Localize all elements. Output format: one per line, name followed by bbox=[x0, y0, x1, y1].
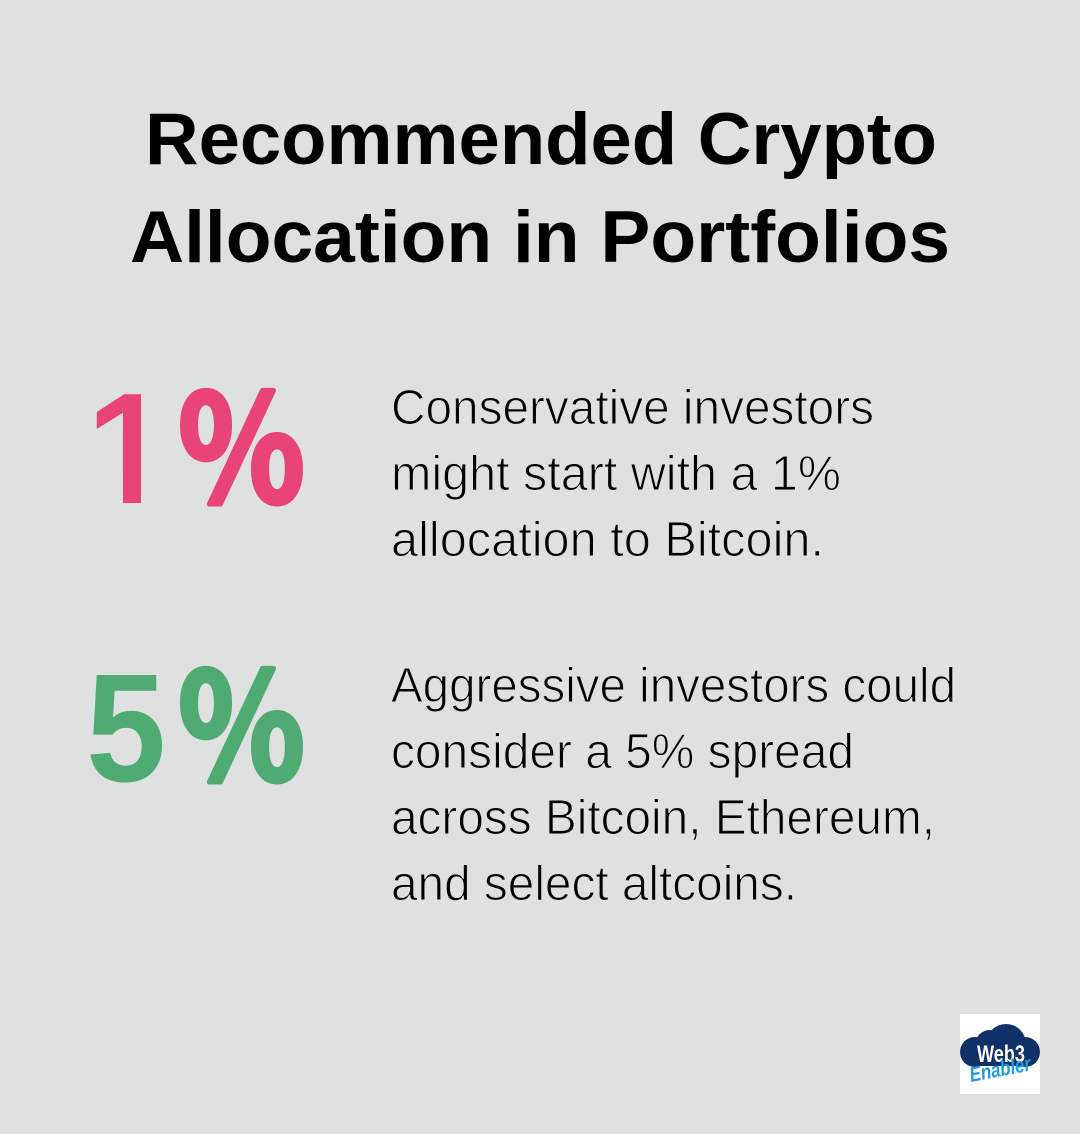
stat: 1%: 1 bbox=[86, 361, 174, 537]
text: aggressive investors: and select altcoins. bbox=[391, 857, 797, 911]
text: aggressive investors: across Bitcoin, Ethereum, bbox=[391, 791, 935, 845]
text: conservative investors: Conservative investors bbox=[391, 381, 874, 435]
text: aggressive investors bbox=[391, 659, 956, 911]
text: conservative investors bbox=[391, 381, 874, 567]
stat: 1%: % bbox=[178, 330, 305, 545]
title: Recommended Crypto bbox=[145, 99, 937, 180]
icon: cloud bbox=[960, 1024, 1040, 1067]
text: aggressive investors: consider a 5% spread bbox=[391, 725, 854, 779]
wordmark: Web3: Web3 bbox=[977, 1041, 1025, 1068]
text: aggressive investors: Aggressive investors could bbox=[391, 659, 956, 713]
title: Allocation in Portfolios bbox=[130, 197, 950, 278]
title bbox=[130, 99, 950, 278]
stat: 5%: % bbox=[178, 608, 305, 823]
wordmark: Enabler: Enabler bbox=[968, 1052, 1034, 1087]
logo: Web3 Enabler bbox=[960, 1014, 1040, 1094]
text: conservative investors: might start with a 1% bbox=[391, 447, 841, 501]
stat: 1% bbox=[85, 330, 305, 545]
text: conservative investors: allocation to Bitcoin. bbox=[391, 513, 824, 567]
stat: 5%: 5 bbox=[86, 642, 166, 814]
stat: 5% bbox=[86, 608, 305, 823]
